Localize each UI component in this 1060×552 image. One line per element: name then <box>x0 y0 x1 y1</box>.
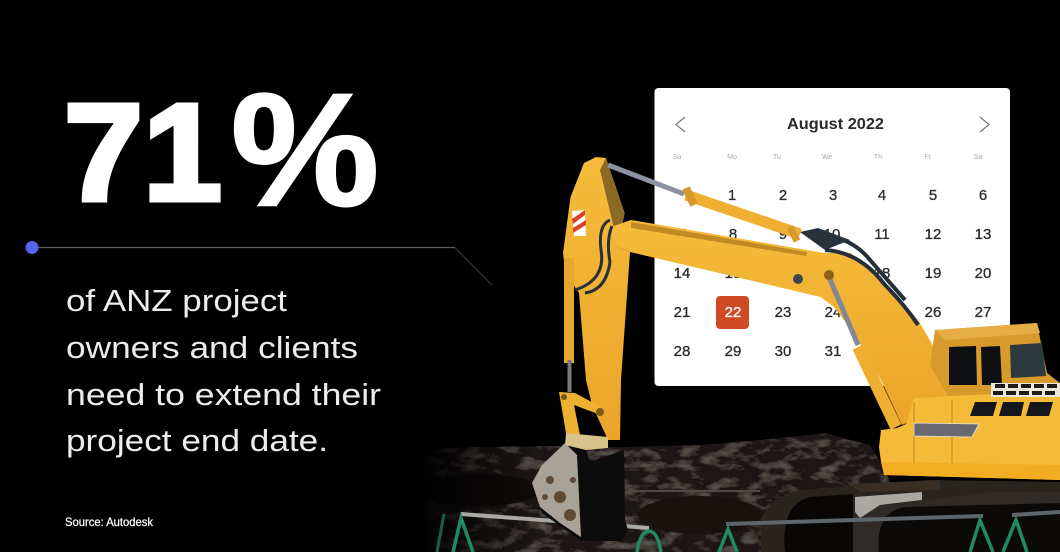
calendar dates: 16 <box>775 265 791 282</box>
calendar dates: 7 <box>678 226 686 243</box>
headline statistic: 71% <box>64 60 379 239</box>
weekday labels: Mo <box>727 154 737 161</box>
calendar dates: 23 <box>775 304 791 321</box>
weekday labels: Sa <box>974 154 982 161</box>
headline statistic: 71%: % <box>231 60 379 239</box>
calendar dates: 8 <box>729 226 737 243</box>
upper boom cylinder <box>608 165 850 250</box>
weekday labels: We <box>822 154 832 161</box>
icon: previous month chevron <box>676 117 685 132</box>
weekday labels: Su <box>673 154 681 161</box>
side stripe <box>914 423 979 437</box>
fence: right rails and green stands <box>719 512 1060 552</box>
calendar month heading: August 2022 <box>787 116 884 133</box>
calendar dates: 1 <box>728 187 736 204</box>
highlighted date marker <box>716 296 749 329</box>
calendar dates: 11 <box>874 226 890 243</box>
description text: project end date. <box>66 423 328 458</box>
calendar dates: 4 <box>878 187 886 204</box>
calendar dates: 18 <box>874 265 890 282</box>
source note: Source: Autodesk <box>65 515 154 529</box>
calendar dates: 20 <box>975 265 991 282</box>
calendar dates: 19 <box>925 265 941 282</box>
excavator tracks <box>761 480 1060 552</box>
calendar dates: 31 <box>825 343 841 360</box>
weekday labels: Tu <box>773 154 781 161</box>
illustration: excavator <box>532 157 1060 552</box>
calendar dates: 26 <box>925 304 941 321</box>
hydraulic hoses <box>575 220 918 325</box>
weekday labels: Fr <box>925 154 932 161</box>
headline statistic: 71%: 71 <box>64 76 222 230</box>
calendar dates: 2 <box>779 187 787 204</box>
calendar dates: 12 <box>925 226 941 243</box>
description text: of ANZ project <box>66 283 287 318</box>
roof grille <box>991 383 1060 397</box>
calendar dates: 3 <box>829 187 837 204</box>
calendar dates: 15 <box>725 265 741 282</box>
engine vents <box>970 402 1053 416</box>
calendar dates: 6 <box>979 187 987 204</box>
description text: owners and clients <box>66 330 358 365</box>
description text: need to extend their <box>66 377 381 412</box>
calendar dates: 27 <box>975 304 991 321</box>
weekday labels: Th <box>874 154 882 161</box>
calendar dates: 25 <box>874 304 890 321</box>
excavator stick arm <box>563 157 630 440</box>
calendar dates: 24 <box>825 304 841 321</box>
calendar dates: 13 <box>975 226 991 243</box>
calendar dates: 22 <box>725 304 741 321</box>
panel: calendar <box>654 88 1010 386</box>
ground and dirt <box>430 433 891 552</box>
calendar dates: 29 <box>725 343 741 360</box>
calendar dates: 9 <box>779 226 787 243</box>
calendar dates <box>674 187 991 360</box>
fence: left rail and green stands <box>437 514 661 552</box>
description text <box>66 283 381 458</box>
weekday labels <box>673 154 982 161</box>
calendar dates: 28 <box>674 343 690 360</box>
excavator bucket <box>532 443 628 541</box>
calendar dates: 5 <box>929 187 937 204</box>
bucket cylinder and linkage <box>559 258 608 450</box>
calendar dates: 30 <box>775 343 791 360</box>
excavator cab <box>930 323 1060 400</box>
calendar dates: 10 <box>824 226 840 243</box>
lower boom cylinder <box>793 270 896 427</box>
connector line with blue dot <box>26 241 492 285</box>
calendar dates: 21 <box>674 304 690 321</box>
main boom <box>611 220 970 425</box>
icon: next month chevron <box>980 117 989 132</box>
calendar dates: 17 <box>825 265 841 282</box>
warning stripe decal <box>572 210 586 236</box>
excavator body <box>879 383 1060 480</box>
calendar dates: 14 <box>674 265 690 282</box>
